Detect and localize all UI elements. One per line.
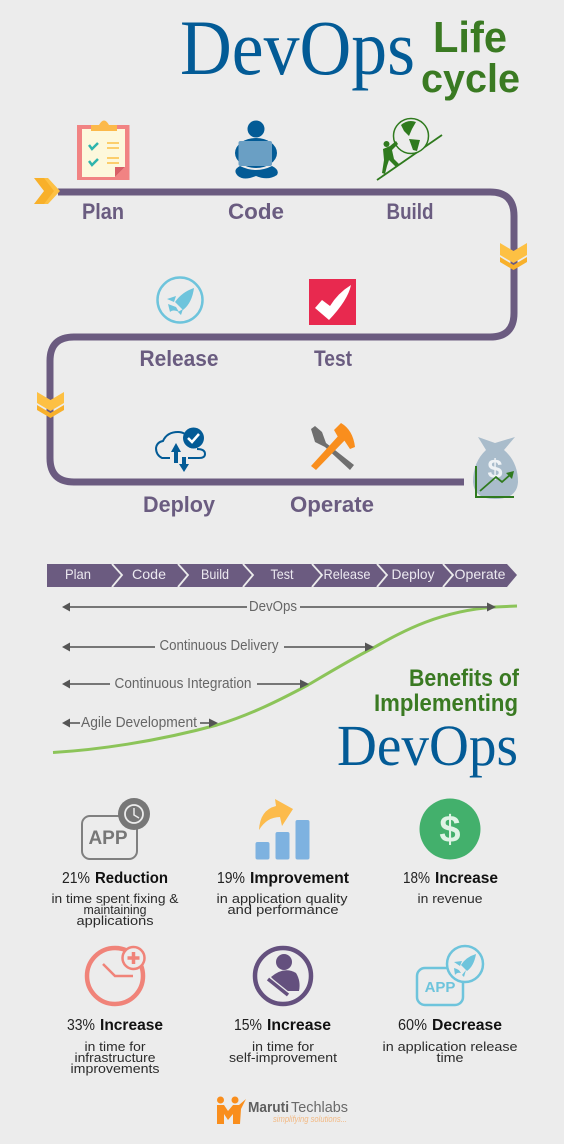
panel: 15% increase: Increase [267, 1017, 331, 1034]
panel: 21% reduction: 21% [62, 870, 90, 887]
icon: operate tools [311, 423, 355, 470]
arrow: DevOps span: DevOps [249, 599, 297, 615]
panel: 15% increase: self-improvement [229, 1050, 337, 1065]
chevron process bar: Test [270, 566, 294, 582]
panel: 18% increase revenue: in revenue [418, 891, 482, 906]
arrow: DevOps span [62, 599, 496, 615]
panel: 60% decrease [382, 946, 518, 1065]
panel: 19% improvement: Improvement [250, 870, 350, 887]
panel: 15% increase [229, 948, 337, 1065]
panel: 60% decrease: time [436, 1050, 464, 1065]
panel: 18% increase revenue: Increase [435, 870, 498, 887]
chevron process bar: Release [324, 566, 371, 582]
icon: deploy cloud [156, 428, 205, 472]
heading: benefits of implementing DevOps: Implementing [374, 690, 518, 717]
icon: money bag with growth chart [473, 437, 518, 499]
panel: 15% increase: 15% [234, 1017, 262, 1034]
panel: 60% decrease: Decrease [432, 1017, 502, 1034]
logo: Maruti Techlabs: simplifying solutions... [273, 1114, 347, 1124]
panel: 60% decrease: 60% [398, 1017, 427, 1034]
chevron process bar: Code [132, 566, 166, 582]
chevron process bar [47, 564, 517, 587]
icon: app with clock: APP [88, 828, 128, 849]
label: code: Code [228, 199, 284, 224]
panel: 33% increase: infrastructure [74, 1050, 156, 1065]
icon: app with rocket: APP [425, 979, 455, 996]
logo: Maruti Techlabs: Techlabs [291, 1099, 348, 1116]
icon: dollar coin: $ [439, 809, 461, 851]
panel: 21% reduction: in time spent fixing & [52, 891, 179, 906]
panel: 18% increase revenue [403, 798, 498, 906]
title: cycle [421, 57, 520, 101]
chevron process bar: Plan [65, 566, 91, 582]
icon: person with wrench [255, 948, 311, 1004]
panel: 21% reduction: maintaining [84, 902, 146, 917]
logo: Maruti Techlabs: Maruti [248, 1099, 289, 1116]
icon: code person with laptop [235, 120, 278, 178]
chevron process bar: Deploy [392, 566, 434, 582]
panel: 21% reduction: Reduction [95, 870, 168, 887]
panel: 33% increase: 33% [67, 1017, 95, 1034]
panel: 18% increase revenue: 18% [403, 870, 430, 887]
panel: 15% increase: in time for [252, 1039, 315, 1054]
icon: bar chart with arrow [256, 799, 310, 860]
icon: money bag with growth chart: $ [487, 454, 503, 484]
arrow: Agile Development span: Agile Development [81, 715, 197, 731]
panel: 19% improvement: 19% [217, 870, 245, 887]
label: release: Release [140, 346, 218, 371]
panel: 33% increase: improvements [70, 1061, 160, 1076]
chevron process bar: Operate [454, 566, 506, 582]
arrow: right chevrons [500, 243, 527, 270]
arrow: start chevrons [34, 178, 60, 204]
icon: build figure pushing globe [377, 118, 442, 180]
panel: 19% improvement [216, 799, 350, 917]
arrow: Continuous Delivery span [62, 638, 374, 654]
panel: 21% reduction: applications [76, 913, 154, 928]
heading: benefits of implementing DevOps [337, 665, 520, 778]
icon: release rocket [158, 278, 202, 322]
arrow: Continuous Integration span [62, 676, 309, 692]
icon: test checkmark [309, 279, 356, 325]
panel: 33% increase: in time for [84, 1039, 146, 1054]
arrow: Continuous Delivery span: Continuous Delivery [160, 638, 279, 654]
icon: clock with plus [87, 947, 144, 1004]
heading: benefits of implementing DevOps: Benefits of [409, 665, 520, 692]
panel: 19% improvement: and performance [228, 902, 338, 917]
arrow: left chevrons [37, 392, 64, 418]
icon: plan clipboard [77, 120, 130, 180]
panel: 60% decrease: in application release [382, 1039, 518, 1054]
lifecycle path [50, 192, 514, 482]
title: DevOps [180, 4, 415, 91]
title [180, 4, 520, 101]
label: operate: Operate [290, 492, 374, 517]
label: deploy: Deploy [143, 492, 216, 517]
title: Life [433, 13, 507, 62]
heading: benefits of implementing DevOps: DevOps [337, 713, 518, 778]
logo: Maruti Techlabs [217, 1096, 348, 1124]
label: test: Test [314, 346, 353, 371]
arrow: Continuous Integration span: Continuous Integration [114, 676, 252, 692]
label: plan: Plan [82, 199, 124, 224]
panel: 21% reduction [52, 798, 179, 928]
panel: 19% improvement: in application quality [216, 891, 348, 906]
panel: 33% increase [67, 947, 163, 1076]
label: build: Build [386, 199, 434, 224]
chevron process bar: Build [201, 566, 229, 582]
panel: 33% increase: Increase [100, 1017, 163, 1034]
chart: adoption curve [53, 606, 517, 752]
